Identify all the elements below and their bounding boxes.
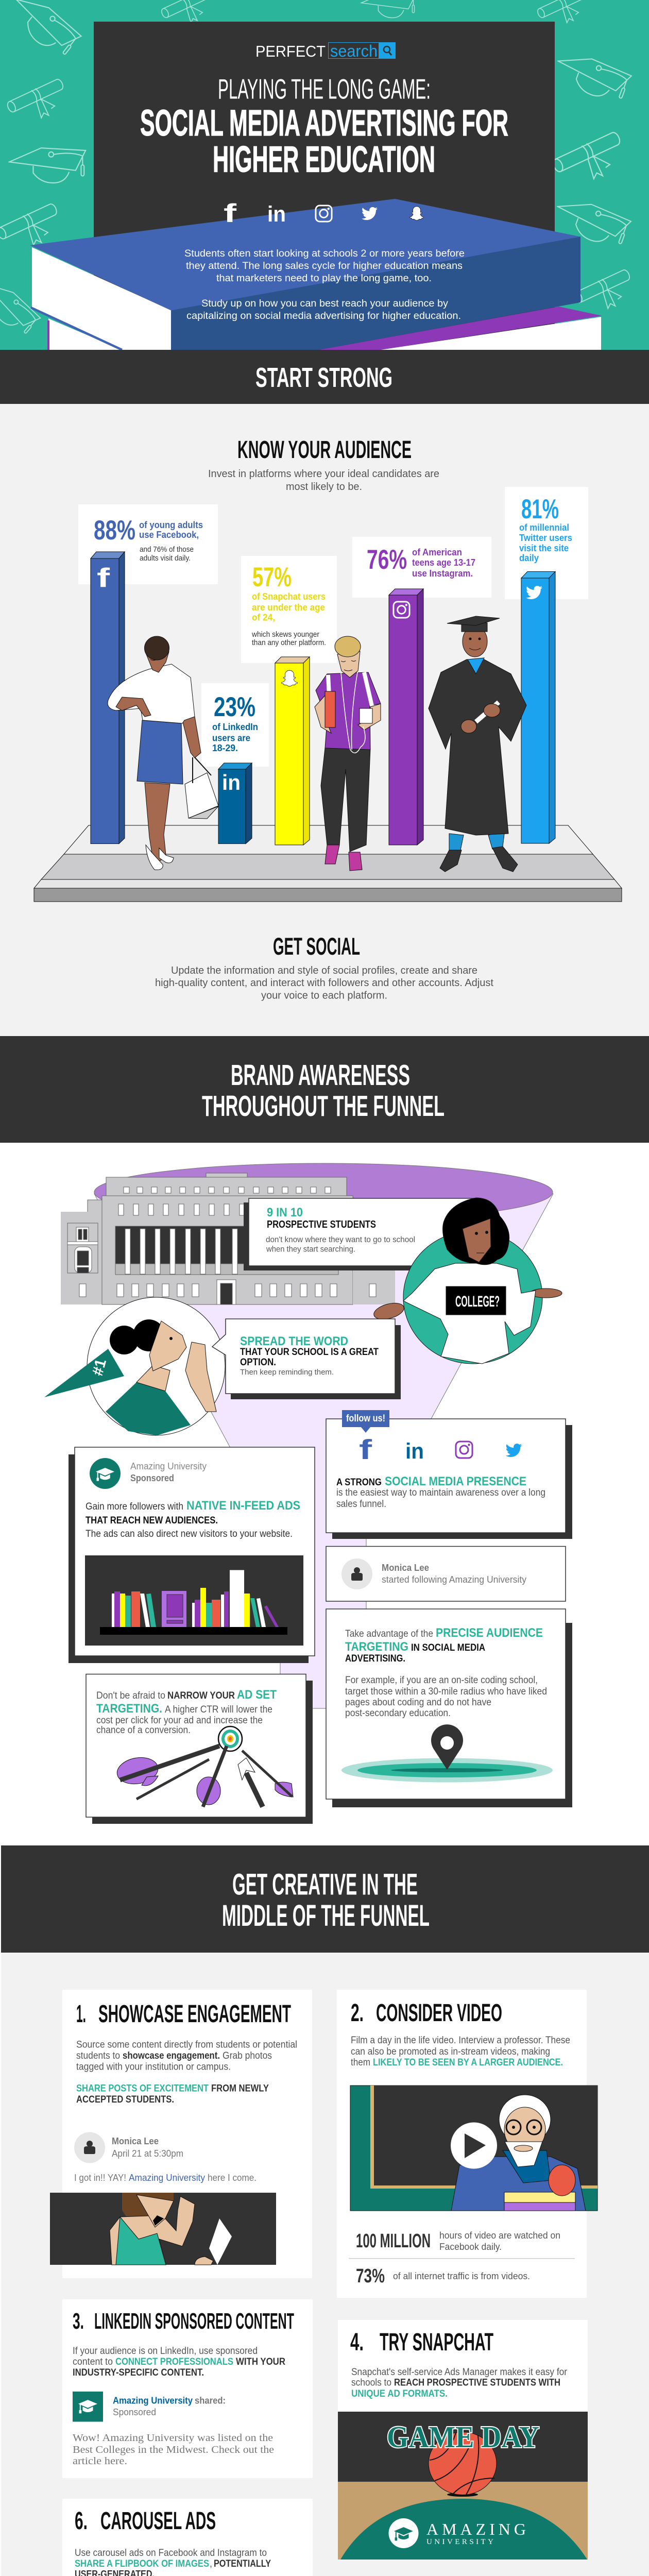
stacked books bbox=[30, 199, 602, 350]
panel: 6 carousel ads: POTENTIALLY bbox=[214, 2558, 271, 2569]
panel: 3 linkedin sponsored content: Best Colleges in the Midwest. Check out the bbox=[73, 2444, 274, 2455]
intro text: Study up on how you can best reach your audience by bbox=[201, 298, 449, 309]
intro text: Students often start looking at schools 2 or more years before bbox=[184, 248, 465, 259]
logo: PERFECT bbox=[255, 42, 326, 60]
card: strong social media presence: is the easiest way to maintain awareness over a long bbox=[336, 1487, 545, 1498]
card: precise audience targeting: pages about coding and do not have bbox=[345, 1697, 491, 1708]
card: facebook stat: of young adults bbox=[139, 520, 203, 530]
stat: 100 million: 100 MILLION bbox=[356, 2230, 431, 2252]
stat: 100 million: hours of video are watched on bbox=[439, 2230, 560, 2241]
card: twitter stat: daily bbox=[519, 553, 539, 563]
panel: 3 linkedin sponsored content bbox=[62, 2299, 313, 2478]
post header: April 21 at 5:30pm bbox=[112, 2148, 183, 2159]
panel: 4 try snapchat: 4. bbox=[350, 2329, 364, 2356]
intro text: that marketers need to play the long game, too. bbox=[216, 273, 432, 284]
card: facebook stat: 88% bbox=[94, 515, 135, 546]
card: strong social media presence bbox=[326, 1410, 572, 1539]
campus building bbox=[61, 1173, 395, 1304]
panel: 4 try snapchat: UNIQUE AD FORMATS. bbox=[351, 2388, 448, 2399]
panel: 1 showcase engagement: Source some content directly from students or potential bbox=[76, 2039, 297, 2050]
card: snapchat stat: which skews younger bbox=[251, 630, 319, 639]
card: native in-feed ads: Gain more followers with bbox=[86, 1501, 183, 1512]
heading: get social bbox=[155, 933, 493, 1002]
snapchat ad: game day: GAME DAY bbox=[387, 2420, 539, 2454]
panel: 1 showcase engagement: Grab photos bbox=[223, 2050, 272, 2061]
panel: 3 linkedin sponsored content: Wow! Amazing University was listed on the bbox=[73, 2432, 273, 2444]
panel: 1 showcase engagement: SHOWCASE ENGAGEMENT bbox=[98, 2001, 291, 2028]
panel: 3 linkedin sponsored content: INDUSTRY-SPECIFIC CONTENT. bbox=[73, 2367, 204, 2378]
card: snapchat stat: 57% bbox=[252, 562, 292, 592]
card: facebook stat: and 76% of those bbox=[140, 545, 194, 554]
heading: get social: GET SOCIAL bbox=[273, 933, 360, 960]
card: linkedin stat bbox=[201, 683, 269, 767]
image: bookshelf bbox=[85, 1555, 303, 1646]
card: native in-feed ads bbox=[69, 1447, 315, 1663]
panel: 2 consider video: can also be promoted as in-stream videos, making bbox=[351, 2046, 550, 2057]
card: monica lee notification bbox=[326, 1547, 566, 1601]
stat: 73 percent: of all internet traffic is from videos. bbox=[393, 2271, 530, 2281]
panel: 4 try snapchat: Snapchat's self-service Ads Manager makes it easy for bbox=[351, 2367, 568, 2378]
image: student reading letter bbox=[50, 2193, 276, 2265]
card: narrow your ad set targeting bbox=[86, 1674, 313, 1824]
person: woman shrugging, college?: COLLEGE? bbox=[455, 1293, 500, 1310]
card: spread the word bbox=[212, 1319, 401, 1399]
panel: 1 showcase engagement: SHARE POSTS OF EXCITEMENT bbox=[76, 2083, 209, 2094]
panel: 6 carousel ads: Use carousel ads on Facebook and Instagram to bbox=[75, 2548, 267, 2558]
bar: facebook: f bbox=[97, 563, 110, 593]
card: precise audience targeting: ADVERTISING. bbox=[345, 1653, 405, 1664]
card: narrow your ad set targeting: TARGETING. bbox=[96, 1702, 162, 1716]
follow us tag: follow us! bbox=[346, 1413, 385, 1424]
intro text: they attend. The long sales cycle for higher education means bbox=[186, 261, 463, 272]
stat: 100 million: Facebook daily. bbox=[439, 2242, 502, 2252]
card: instagram stat: teens age 13-17 bbox=[412, 557, 475, 568]
panel: 1 showcase engagement: tagged with your institution or campus. bbox=[76, 2062, 231, 2072]
platform stage bbox=[34, 825, 622, 902]
section band: brand awareness: BRAND AWARENESS bbox=[231, 1059, 410, 1092]
panel: 3 linkedin sponsored content: If your audience is on LinkedIn, use sponsored bbox=[73, 2346, 258, 2357]
icon: map pin on target bbox=[341, 1724, 553, 1783]
panel: 1 showcase engagement: ACCEPTED STUDENTS. bbox=[76, 2094, 174, 2105]
card: linkedin stat: 23% bbox=[214, 692, 255, 722]
card: narrow your ad set targeting: Don't be afraid to bbox=[96, 1690, 165, 1701]
post header: Sponsored bbox=[113, 2407, 156, 2417]
card: facebook stat: adults visit daily. bbox=[140, 554, 191, 563]
panel: 3 linkedin sponsored content: CONNECT PROFESSIONALS bbox=[115, 2357, 233, 2367]
stat: 100 million bbox=[356, 2230, 560, 2252]
section band: get creative: MIDDLE OF THE FUNNEL bbox=[222, 1899, 430, 1933]
section band: start strong: START STRONG bbox=[255, 362, 392, 393]
card: twitter stat bbox=[505, 487, 588, 599]
bar: linkedin: in bbox=[222, 770, 241, 794]
person: woman whispering with pennant: #1 bbox=[89, 1357, 110, 1378]
card: precise audience targeting: PRECISE AUDIENCE bbox=[436, 1626, 543, 1640]
card: native in-feed ads: THAT REACH NEW AUDIENCES. bbox=[86, 1515, 218, 1526]
card: 9 in 10 prospective students: don't know where they want to go to school bbox=[266, 1235, 415, 1244]
heading: know your audience: Invest in platforms where your ideal candidates are bbox=[208, 468, 439, 480]
section band: brand awareness: THROUGHOUT THE FUNNEL bbox=[202, 1090, 445, 1123]
panel: 1 showcase engagement: I got in!! YAY! bbox=[74, 2173, 126, 2183]
header social icons: f bbox=[224, 199, 237, 228]
snapchat ad: game day: AMAZING bbox=[426, 2520, 526, 2538]
card: precise audience targeting: post-secondary education. bbox=[345, 1708, 451, 1719]
video still: professor at chalkboard bbox=[350, 2086, 597, 2211]
person: woman checking watch bbox=[108, 636, 218, 870]
card: snapchat stat bbox=[241, 556, 337, 663]
card: linkedin stat: of LinkedIn bbox=[212, 722, 258, 732]
post header bbox=[74, 2132, 183, 2163]
heading: get social: high-quality content, and interact with followers and other accounts. Adjust bbox=[155, 977, 493, 989]
card: spread the word: Then keep reminding them. bbox=[240, 1368, 334, 1377]
card: linkedin stat: 18-29. bbox=[212, 743, 238, 753]
bar: twitter bbox=[521, 572, 555, 843]
person: woman whispering with pennant bbox=[44, 1297, 225, 1435]
card: strong social media presence: A STRONG bbox=[336, 1477, 382, 1488]
card: snapchat stat: are under the age bbox=[252, 602, 325, 613]
snapchat ad: game day bbox=[338, 2412, 588, 2560]
card: instagram stat: of American bbox=[412, 547, 462, 557]
panel: 2 consider video: LIKELY TO BE SEEN BY A LARGER AUDIENCE. bbox=[373, 2057, 563, 2068]
heading: know your audience: most likely to be. bbox=[286, 481, 362, 493]
card: narrow your ad set targeting: A higher CTR will lower the bbox=[165, 1704, 272, 1715]
card: spread the word: SPREAD THE WORD bbox=[240, 1334, 348, 1348]
panel: 2 consider video: 2. bbox=[351, 1999, 364, 2027]
card: narrow your ad set targeting: NARROW YOUR bbox=[167, 1690, 235, 1701]
intro text bbox=[184, 248, 465, 321]
section band: get creative bbox=[1, 1845, 649, 1953]
card: snapchat stat: than any other platform. bbox=[252, 638, 326, 647]
social icons row: in bbox=[405, 1439, 424, 1464]
heading: get social: your voice to each platform. bbox=[261, 990, 387, 1002]
header social icons bbox=[224, 199, 424, 228]
panel: 6 carousel ads bbox=[62, 2499, 313, 2576]
snapchat ad: game day: UNIVERSITY bbox=[426, 2538, 493, 2546]
heading: know your audience bbox=[208, 436, 439, 493]
logo: search bbox=[330, 42, 378, 60]
illustration: darts and target bbox=[115, 1726, 293, 1807]
panel: 1 showcase engagement: showcase engagement. bbox=[123, 2050, 220, 2061]
logo bbox=[255, 42, 396, 60]
card: twitter stat: 81% bbox=[521, 494, 559, 524]
person: woman shrugging, college? bbox=[372, 1198, 562, 1364]
card: snapchat stat: of 24, bbox=[252, 612, 275, 622]
card: twitter stat: visit the site bbox=[519, 543, 569, 553]
header social icons: in bbox=[267, 202, 286, 227]
header pattern of graduation caps and diplomas bbox=[0, 0, 639, 339]
card: precise audience targeting: TARGETING bbox=[345, 1640, 408, 1654]
card: 9 in 10 prospective students: when they start searching. bbox=[266, 1245, 355, 1253]
card: monica lee notification: Monica Lee bbox=[382, 1563, 429, 1573]
person: student with phone bbox=[315, 636, 381, 871]
card: facebook stat bbox=[78, 504, 218, 584]
intro text: capitalizing on social media advertising for higher education. bbox=[186, 311, 461, 321]
card: spread the word: OPTION. bbox=[240, 1357, 276, 1368]
card: precise audience targeting: target those within a 30-mile radius who have liked bbox=[345, 1686, 547, 1697]
panel: 3 linkedin sponsored content: 3. bbox=[73, 2309, 84, 2334]
card: monica lee notification: started following Amazing University bbox=[382, 1574, 526, 1585]
card: linkedin stat: users are bbox=[212, 733, 250, 743]
panel: 6 carousel ads: CAROUSEL ADS bbox=[100, 2507, 216, 2535]
header title panel bbox=[94, 22, 555, 351]
section band: start strong bbox=[0, 350, 649, 404]
bar: linkedin bbox=[218, 763, 252, 844]
panel: 3 linkedin sponsored content: content to bbox=[73, 2357, 113, 2367]
card: twitter stat: of millennial bbox=[519, 522, 569, 533]
person: graduate bbox=[429, 616, 526, 872]
card: 9 in 10 prospective students bbox=[244, 1198, 476, 1270]
card: spread the word: THAT YOUR SCHOOL IS A GREAT bbox=[240, 1347, 379, 1358]
card: instagram stat bbox=[352, 537, 491, 598]
card: strong social media presence: SOCIAL MEDIA PRESENCE bbox=[385, 1475, 526, 1488]
panel: 2 consider video: CONSIDER VIDEO bbox=[376, 1999, 502, 2027]
card: facebook stat: use Facebook, bbox=[139, 530, 199, 540]
card: twitter stat: Twitter users bbox=[519, 533, 572, 543]
card: instagram stat: use Instagram. bbox=[412, 568, 473, 579]
panel: 6 carousel ads: , bbox=[210, 2558, 212, 2569]
panel: 6 carousel ads: SHARE A FLIPBOOK OF IMAGES bbox=[75, 2558, 209, 2569]
panel: 4 try snapchat: TRY SNAPCHAT bbox=[380, 2329, 493, 2356]
panel: 2 consider video: Film a day in the life video. Interview a professor. These bbox=[351, 2035, 570, 2046]
bar: instagram bbox=[389, 589, 423, 845]
section band: brand awareness bbox=[0, 1036, 649, 1143]
card: strong social media presence: sales funnel. bbox=[336, 1499, 386, 1510]
panel: 3 linkedin sponsored content: WITH YOUR bbox=[236, 2357, 285, 2367]
panel: 1 showcase engagement: FROM NEWLY bbox=[211, 2083, 269, 2094]
card: native in-feed ads: The ads can also direct new visitors to your website. bbox=[86, 1529, 293, 1539]
panel: 4 try snapchat: REACH PROSPECTIVE STUDENTS WITH bbox=[394, 2377, 560, 2388]
follow us tag bbox=[342, 1410, 389, 1433]
bar: facebook bbox=[91, 552, 125, 844]
card: native in-feed ads: Sponsored bbox=[130, 1473, 174, 1483]
stat cards bbox=[78, 487, 588, 767]
panel: 1 showcase engagement bbox=[50, 1990, 312, 2278]
large funnel bbox=[94, 1163, 553, 1708]
card: snapchat stat: of Snapchat users bbox=[252, 591, 326, 602]
card: 9 in 10 prospective students: 9 IN 10 bbox=[267, 1206, 303, 1219]
card: narrow your ad set targeting: cost per click for your ad and increase the bbox=[96, 1715, 263, 1726]
card: precise audience targeting: For example, if you are an on-site coding school, bbox=[345, 1675, 538, 1686]
card: narrow your ad set targeting: AD SET bbox=[237, 1688, 277, 1702]
card: 9 in 10 prospective students: PROSPECTIVE STUDENTS bbox=[267, 1219, 376, 1230]
social icons row: f bbox=[359, 1434, 372, 1465]
card: narrow your ad set targeting: chance of a conversion. bbox=[96, 1725, 191, 1736]
post header: Monica Lee bbox=[112, 2136, 159, 2146]
social icons row bbox=[359, 1434, 522, 1465]
panel: 6 carousel ads: 6. bbox=[75, 2507, 88, 2535]
heading: get social: Update the information and style of social profiles, create and share bbox=[171, 965, 477, 976]
card: native in-feed ads: Amazing University bbox=[130, 1461, 207, 1471]
panel: 1 showcase engagement: 1. bbox=[76, 2001, 86, 2028]
section band: get creative: GET CREATIVE IN THE bbox=[232, 1868, 418, 1901]
panel: 2 consider video bbox=[337, 1990, 597, 2298]
card: precise audience targeting: Take advantage of the bbox=[345, 1629, 433, 1639]
card: precise audience targeting bbox=[326, 1609, 572, 1807]
title line 1: PLAYING THE LONG GAME: bbox=[218, 73, 431, 105]
post header: Amazing University bbox=[113, 2396, 193, 2406]
card: native in-feed ads: NATIVE IN-FEED ADS bbox=[186, 1499, 300, 1513]
stat: 73 percent bbox=[356, 2265, 530, 2287]
panel: 3 linkedin sponsored content: article here. bbox=[73, 2455, 127, 2467]
bar: snapchat bbox=[275, 657, 310, 845]
panel: 4 try snapchat: schools to bbox=[351, 2377, 391, 2388]
post header: shared: bbox=[195, 2396, 226, 2406]
panel: 1 showcase engagement: here I come. bbox=[208, 2173, 257, 2183]
panel: 4 try snapchat bbox=[338, 2320, 588, 2560]
card: instagram stat: 76% bbox=[367, 545, 407, 575]
stat: 73 percent: 73% bbox=[356, 2265, 385, 2287]
panel: 3 linkedin sponsored content: LINKEDIN SPONSORED CONTENT bbox=[94, 2309, 294, 2334]
heading: know your audience: KNOW YOUR AUDIENCE bbox=[237, 436, 412, 464]
panel: 1 showcase engagement: Amazing University bbox=[129, 2173, 205, 2183]
panel: 2 consider video: them bbox=[351, 2057, 370, 2068]
title line 3: HIGHER EDUCATION bbox=[213, 139, 435, 180]
panel: 1 showcase engagement: students to bbox=[76, 2050, 120, 2061]
card: precise audience targeting: IN SOCIAL MEDIA bbox=[411, 1642, 485, 1653]
post header bbox=[73, 2392, 226, 2421]
